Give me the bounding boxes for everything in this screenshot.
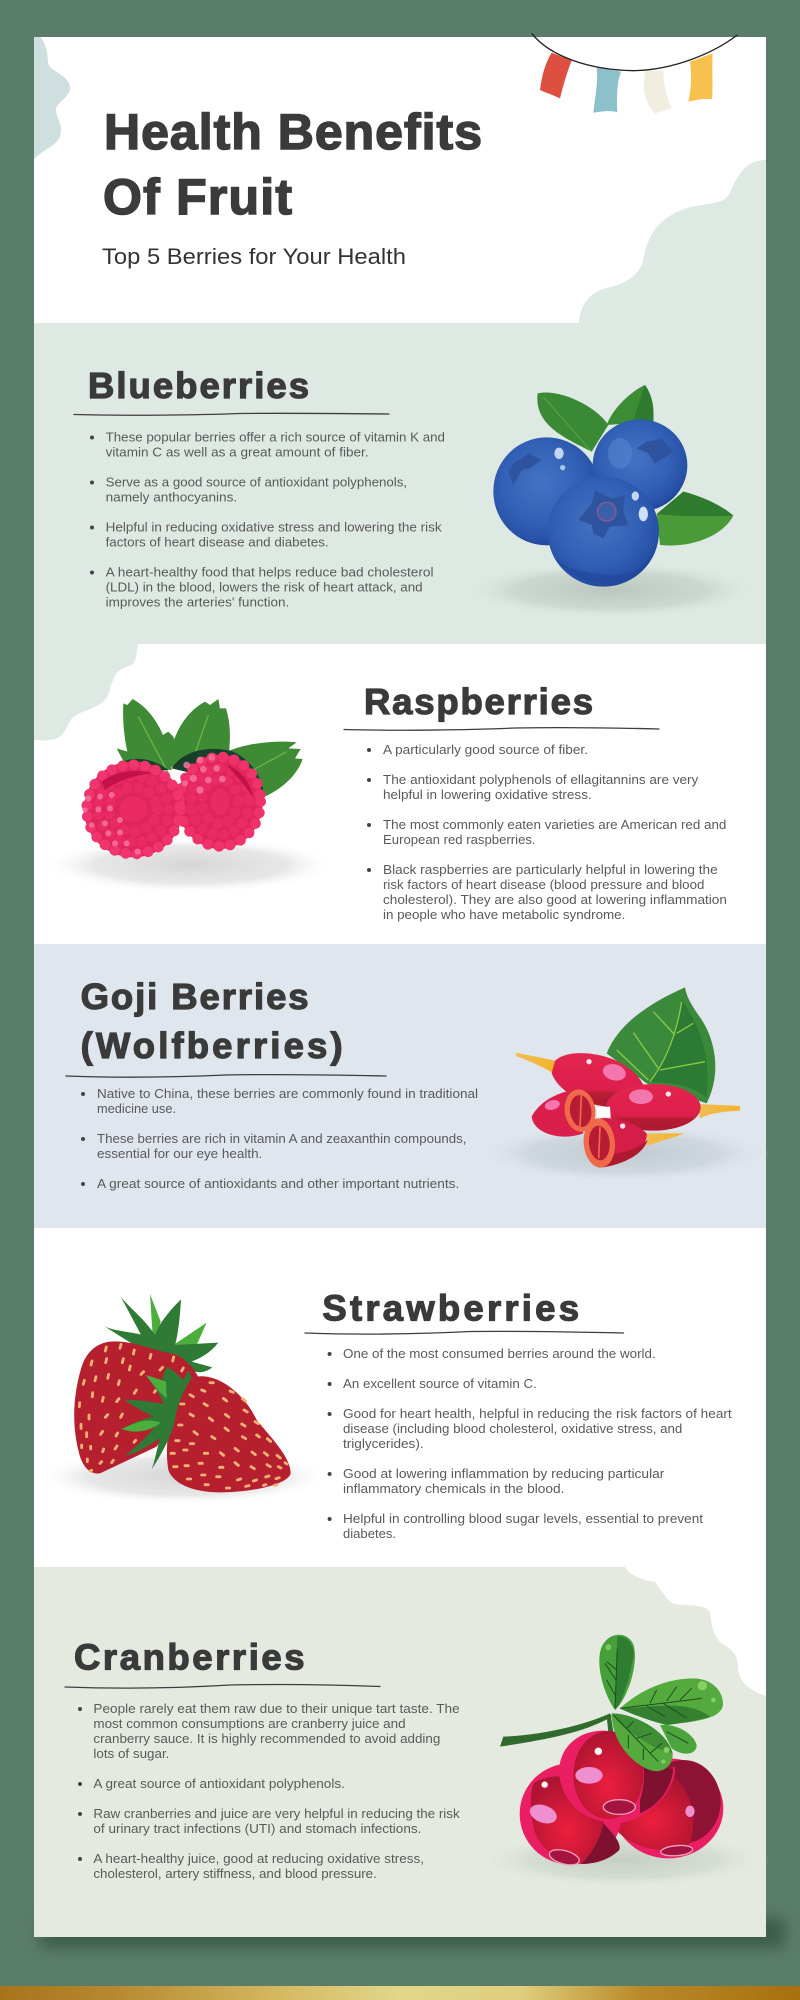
blob: right: [579, 160, 766, 325]
heading: cranberries: Cranberries: [74, 1636, 305, 1678]
text block: blueberry bullets: vitamin C as well as a great amount of fiber.: [106, 446, 369, 460]
text block: cranberry bullets: A great source of antioxidant polyphenols.: [93, 1777, 345, 1791]
subtitle: Top 5 Berries for Your Health: [102, 244, 406, 269]
text block: raspberry bullets: The antioxidant polyphenols of ellagitannins are very: [383, 773, 699, 787]
heading: raspberries: Raspberries: [364, 681, 593, 722]
text block: raspberry bullets: cholesterol). They are also good at lowering inflammation: [383, 893, 727, 907]
text block: strawberry bullets: Good for heart health, helpful in reducing the risk factors of heart: [343, 1407, 732, 1421]
icon: cranberries: [477, 1635, 770, 1888]
text block: strawberry bullets: Helpful in controlling blood sugar levels, essential to prevent: [343, 1512, 704, 1526]
text block: cranberry bullets: People rarely eat them raw due to their unique tart taste. The: [93, 1702, 460, 1716]
text block: strawberry bullets: Good at lowering inflammation by reducing particular: [343, 1467, 664, 1481]
text block: strawberry bullets: [328, 1347, 732, 1541]
icon: blueberries: [462, 385, 758, 618]
panel: blueberries: [34, 323, 766, 644]
icon: bunting flags: [532, 33, 737, 113]
text block: blueberry bullets: namely anthocyanins.: [106, 490, 237, 504]
panel: header: [34, 33, 766, 325]
icon: goji berries: [477, 987, 770, 1183]
text block: blueberry bullets: factors of heart disease and diabetes.: [106, 536, 329, 550]
text block: raspberry bullets: Black raspberries are particularly helpful in lowering the: [383, 863, 718, 877]
text block: raspberry bullets: [367, 743, 727, 922]
panel: goji berries: [34, 944, 770, 1228]
text block: raspberry bullets: A particularly good source of fiber.: [383, 743, 588, 757]
text block: cranberry bullets: most common consumptions are cranberry juice and: [93, 1717, 406, 1731]
text block: cranberry bullets: [78, 1702, 460, 1881]
title: Of Fruit: [103, 169, 292, 225]
blob: top left: [34, 644, 138, 740]
text block: blueberry bullets: These popular berries offer a rich source of vitamin K and: [106, 430, 445, 444]
text block: goji bullets: A great source of antioxidants and other important nutrients.: [97, 1177, 459, 1191]
heading: goji berries: [81, 976, 343, 1066]
title: [103, 104, 482, 225]
text block: strawberry bullets: An excellent source of vitamin C.: [343, 1377, 537, 1391]
text block: cranberry bullets: A heart-healthy juice, good at reducing oxidative stress,: [93, 1852, 424, 1866]
title: Health Benefits: [104, 104, 482, 160]
text block: goji bullets: essential for our eye health.: [97, 1147, 262, 1161]
rule: [344, 728, 659, 730]
icon: strawberries: [35, 1293, 332, 1505]
blob: left: [34, 37, 70, 159]
card shadow: [40, 1918, 785, 1948]
text block: raspberry bullets: risk factors of heart disease (blood pressure and blood: [383, 878, 704, 892]
heading: blueberries: Blueberries: [88, 365, 309, 406]
text block: blueberry bullets: (LDL) in the blood, lowers the risk of heart attack, and: [106, 580, 423, 594]
blob: top right: [625, 1567, 766, 1696]
text block: raspberry bullets: in people who have metabolic syndrome.: [383, 908, 625, 922]
icon: raspberries: [42, 699, 338, 893]
text block: raspberry bullets: European red raspberries.: [383, 833, 536, 847]
panel: strawberries: [34, 1228, 766, 1567]
rule: [66, 1075, 386, 1077]
rule: [74, 413, 389, 415]
text block: raspberry bullets: helpful in lowering oxidative stress.: [383, 788, 592, 802]
text block: blueberry bullets: A heart-healthy food that helps reduce bad cholesterol: [106, 566, 434, 580]
text block: cranberry bullets: of urinary tract infections (UTI) and stomach infections.: [93, 1822, 421, 1836]
text block: goji bullets: medicine use.: [97, 1102, 176, 1116]
rule: [305, 1331, 624, 1334]
text block: strawberry bullets: disease (including blood cholesterol, oxidative stress, and: [343, 1422, 682, 1436]
heading: goji berries: (Wolfberries): [81, 1025, 343, 1066]
text block: cranberry bullets: cranberry sauce. It is highly recommended to avoid adding: [93, 1732, 440, 1746]
text block: goji bullets: [81, 1087, 478, 1191]
text block: strawberry bullets: One of the most consumed berries around the world.: [343, 1347, 656, 1361]
text block: blueberry bullets: Helpful in reducing oxidative stress and lowering the risk: [106, 520, 442, 534]
text block: blueberry bullets: [90, 430, 445, 610]
panel: raspberries: [34, 644, 766, 944]
text block: goji bullets: Native to China, these berries are commonly found in traditional: [97, 1087, 478, 1101]
text block: cranberry bullets: cholesterol, artery stiffness, and blood pressure.: [93, 1867, 377, 1881]
text block: cranberry bullets: lots of sugar.: [93, 1747, 169, 1761]
rule: [65, 1685, 380, 1688]
text block: cranberry bullets: Raw cranberries and juice are very helpful in reducing the risk: [93, 1807, 460, 1821]
text block: strawberry bullets: triglycerides).: [343, 1437, 424, 1451]
text block: raspberry bullets: The most commonly eaten varieties are American red and: [383, 818, 726, 832]
heading: strawberries: Strawberries: [322, 1288, 579, 1328]
text block: strawberry bullets: diabetes.: [343, 1527, 396, 1541]
panel: cranberries: [34, 1567, 770, 1937]
text block: strawberry bullets: inflammatory chemicals in the blood.: [343, 1482, 564, 1496]
gold footer bar: [0, 1986, 800, 2000]
text block: blueberry bullets: Serve as a good source of antioxidant polyphenols,: [106, 476, 407, 490]
heading: goji berries: Goji Berries: [81, 976, 309, 1017]
text block: blueberry bullets: improves the arteries' function.: [106, 596, 289, 610]
text block: goji bullets: These berries are rich in vitamin A and zeaxanthin compounds,: [97, 1132, 466, 1146]
